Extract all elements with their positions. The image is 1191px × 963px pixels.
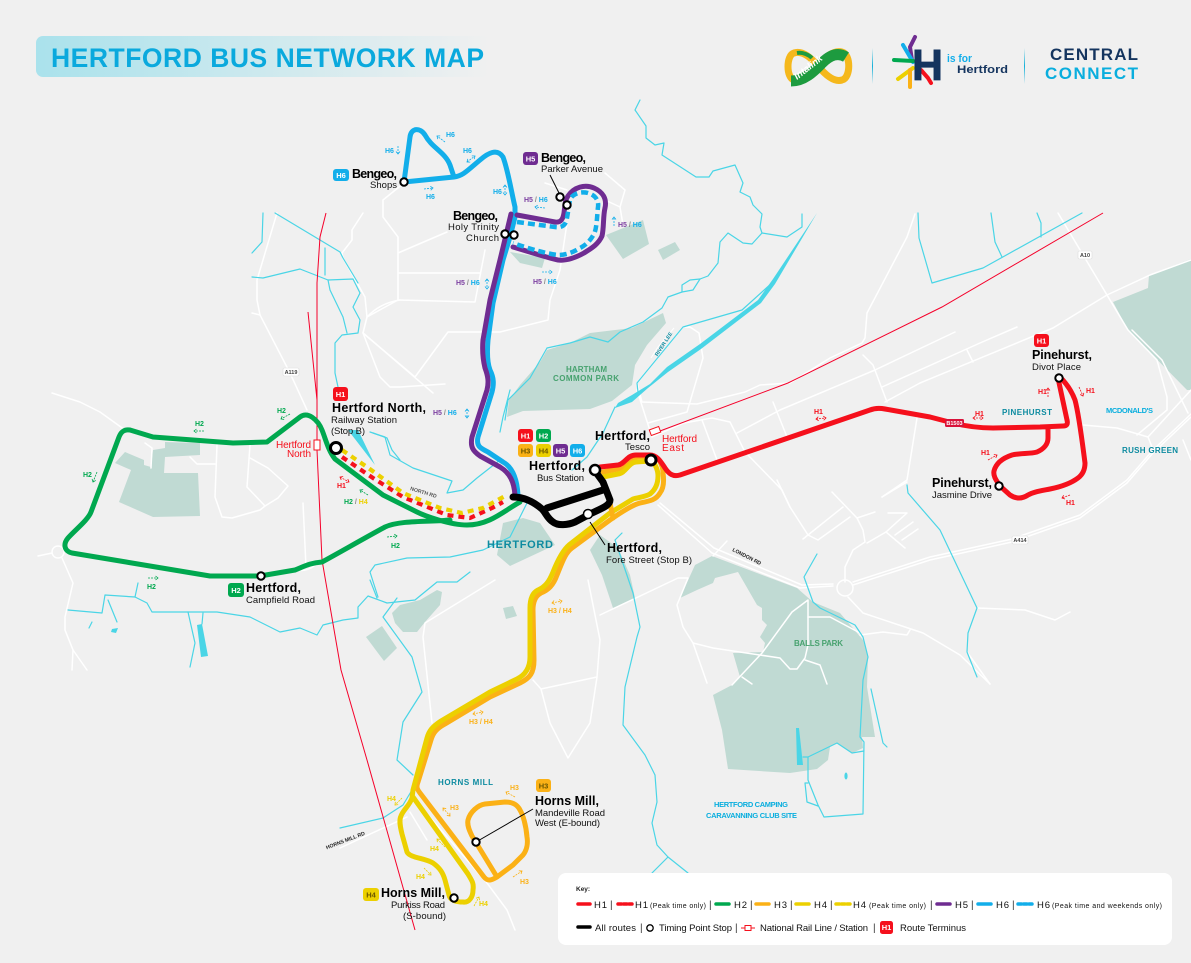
route H6 loop dashed <box>513 192 598 255</box>
direction labels: H3 and H4: H4 <box>479 901 488 908</box>
stop: Horns Mill Purkiss Road: Horns Mill, <box>381 886 445 900</box>
direction labels: H2: H2 <box>147 584 156 591</box>
stop: Hertford Bus Station: Hertford, <box>529 459 585 473</box>
stop: Bengeo Shops: H6 <box>336 171 346 180</box>
direction labels: H3 and H4: H3 <box>520 879 529 886</box>
key row: routes: | <box>610 900 613 911</box>
stop: Hertford Fore Street: Hertford, <box>607 541 662 555</box>
London Rd label: LONDON RD <box>731 547 762 567</box>
title banner <box>36 36 490 77</box>
key row: routes: H1 <box>594 900 607 911</box>
stop: Bengeo Shops: Bengeo, <box>352 167 397 181</box>
direction labels: H3 and H4: H3 / H4 <box>548 608 572 615</box>
direction labels: H3 and H4 <box>387 601 572 908</box>
direction labels: H6: H6 <box>426 194 435 201</box>
key row: other symbols: | <box>640 923 643 934</box>
key row: routes: | <box>971 900 974 911</box>
stop: Bengeo Shops <box>333 167 408 191</box>
station: Hertford East rail: Hertford <box>662 434 697 445</box>
direction labels: H5 / H6: H5 / H6 <box>433 410 457 417</box>
key heading: Key: <box>576 886 590 893</box>
stop: Hertford North: H1 <box>336 390 345 399</box>
direction labels: H6 <box>385 132 505 201</box>
route H2 <box>65 415 520 576</box>
direction labels: H1: H1 <box>814 409 823 416</box>
stop: Horns Mill Purkiss Road <box>363 886 458 922</box>
direction labels: H2: H2 <box>83 472 92 479</box>
direction labels: H3 and H4: H3 / H4 <box>469 719 493 726</box>
stop: Hertford Tesco: Tesco <box>625 442 650 453</box>
logo: H is for Hertford: H <box>912 41 943 90</box>
key row: other symbols: All routes <box>595 923 636 934</box>
shield B1503: B1503 <box>946 421 963 427</box>
logo: Intalink <box>788 52 849 82</box>
H3 H4 connector <box>610 503 613 518</box>
central route badges: H3 <box>521 446 530 456</box>
direction labels: H2: H2 / H4 <box>344 499 368 506</box>
direction labels: H1: H1 <box>1038 389 1047 396</box>
station: Hertford North rail: Hertford <box>276 440 311 451</box>
stop: Pinehurst Divot Place: Pinehurst, <box>1032 348 1092 362</box>
route H6 <box>404 130 518 495</box>
logo: Central Connect: CENTRAL <box>1050 45 1138 64</box>
direction labels: H5 / H6: H5 / H6 <box>456 280 480 287</box>
thick water channels <box>111 213 848 780</box>
place names: COMMON PARK <box>553 374 619 383</box>
title banner: HERTFORD BUS NETWORK MAP <box>51 43 484 73</box>
key row: other symbols: Timing Point Stop <box>659 923 732 934</box>
logo: H is for Hertford: Hertford <box>957 64 1008 76</box>
stop: Pinehurst Divot Place: Divot Place <box>1032 362 1081 373</box>
shield B1503 <box>945 419 964 427</box>
stop: Hertford Bus Station: Bus Station <box>537 473 584 484</box>
key row: routes: H3 <box>774 900 787 911</box>
central route badges: H6 <box>573 446 582 456</box>
key row: routes <box>578 900 1162 911</box>
stop: Hertford Tesco <box>595 429 656 465</box>
stop: Bengeo Holy Trinity Church: Church <box>466 233 499 244</box>
stop: Hertford Campfield Road <box>228 572 315 606</box>
all routes black section <box>513 471 610 525</box>
stop: Horns Mill Mandeville Road <box>472 779 605 846</box>
logo: Intalink: Intalink <box>792 53 826 82</box>
key row: other symbols: | <box>873 923 876 934</box>
central route badges: H1 <box>521 432 530 440</box>
Horns Mill Rd label: HORNS MILL RD <box>325 831 366 851</box>
direction labels: H1 <box>337 387 1095 507</box>
stop: Horns Mill Purkiss Road: (S-bound) <box>403 911 446 922</box>
place names: CARAVANNING CLUB SITE <box>706 811 797 820</box>
North Rd label: NORTH RD <box>409 486 437 500</box>
shield A10 <box>1078 251 1092 259</box>
direction labels: H3 and H4: H4 <box>387 796 396 803</box>
key row: other symbols: H1 <box>882 923 891 932</box>
stop: Horns Mill Purkiss Road: Purkiss Road <box>391 900 445 911</box>
key row: routes: H4 <box>814 900 827 911</box>
logo: H is for Hertford <box>894 37 1008 90</box>
stop: Hertford North <box>330 387 426 454</box>
route H5 loop <box>513 186 606 260</box>
station: Hertford East rail: East <box>662 443 684 454</box>
direction labels: H2: H2 <box>195 421 204 428</box>
route H3 town <box>417 456 664 880</box>
key row: routes: | <box>750 900 753 911</box>
divider <box>872 48 873 84</box>
direction labels: H1: H1 <box>337 483 346 490</box>
direction labels: H5 / H6: H5 / H6 <box>524 197 548 204</box>
direction labels: H6: H6 <box>385 148 394 155</box>
key row: routes: | <box>830 900 833 911</box>
stop: Bengeo Parker Avenue: Bengeo, <box>541 151 586 165</box>
panel: key <box>558 873 1172 945</box>
direction labels: H6: H6 <box>446 132 455 139</box>
key row: other symbols: National Rail Line / Station <box>760 923 868 934</box>
key row: routes: | <box>790 900 793 911</box>
direction labels: H3 and H4: H4 <box>430 846 439 853</box>
direction labels: H3 and H4: H3 <box>510 785 519 792</box>
route H1 peak dashed <box>342 457 503 518</box>
stop: Bengeo Parker Avenue: H5 <box>526 154 535 164</box>
stop: Pinehurst Divot Place: H1 <box>1037 336 1046 346</box>
stop: Bengeo Shops: Shops <box>370 180 397 191</box>
Hertford label: HERTFORD <box>487 539 553 551</box>
stop: Bengeo Holy Trinity Church: Holy Trinity <box>448 222 499 233</box>
key row: routes: | <box>930 900 933 911</box>
divider <box>1024 48 1025 84</box>
stop: Hertford Campfield Road: H2 <box>231 586 241 595</box>
shield A10: A10 <box>1080 253 1090 259</box>
logo: Central Connect: CONNECT <box>1045 64 1139 83</box>
direction labels: H3 and H4: H4 <box>416 874 425 881</box>
stop: Bengeo Holy Trinity Church <box>448 209 518 244</box>
central route badges <box>518 429 585 457</box>
McDonald's label: MCDONALD'S <box>1106 406 1153 415</box>
stop: Bengeo Parker Avenue: Parker Avenue <box>541 164 603 175</box>
direction labels: H1: H1 <box>1066 500 1075 507</box>
logo: H is for Hertford: is for <box>947 53 973 65</box>
key row: routes: (Peak time only) <box>869 903 926 910</box>
logo: Central Connect <box>1045 45 1139 83</box>
stop: Pinehurst Jasmine Drive: Pinehurst, <box>932 476 992 490</box>
route H5 <box>471 214 515 495</box>
direction labels: H5 / H6: H5 / H6 <box>618 222 642 229</box>
key row: routes: H1 <box>635 900 648 911</box>
stop: Hertford Bus Station <box>529 459 600 484</box>
key row: routes: H4 <box>853 900 866 911</box>
rivers and waterways <box>68 100 1082 873</box>
Balls Park label: BALLS PARK <box>794 639 843 648</box>
key row: other symbols: Route Terminus <box>900 923 966 934</box>
shield A119: A119 <box>285 370 297 376</box>
route H1 <box>600 377 1085 498</box>
direction labels: H1: H1 <box>1086 388 1095 395</box>
stop: Hertford Campfield Road: Hertford, <box>246 581 301 595</box>
direction labels: H6: H6 <box>463 148 472 155</box>
key row: routes: H6 <box>1037 900 1050 911</box>
central route badges: H5 <box>556 446 565 456</box>
national rail lines <box>308 213 1103 930</box>
key row: other symbols <box>578 921 966 934</box>
direction labels: H3 and H4: H3 <box>450 805 459 812</box>
direction labels: H2 <box>83 408 400 591</box>
key row: routes: (Peak time only) <box>650 903 706 910</box>
stop: Pinehurst Jasmine Drive <box>932 476 1003 501</box>
key row: routes: (Peak time and weekends only) <box>1052 903 1162 910</box>
stop: Hertford Campfield Road: Campfield Road <box>246 595 315 606</box>
place names <box>438 365 1178 820</box>
central route badges: H2 <box>539 432 548 440</box>
shield A414: A414 <box>1013 538 1028 544</box>
stop: Hertford North: Hertford North, <box>332 401 426 415</box>
stop: Horns Mill Mandeville Road: Mandeville Road <box>535 808 605 819</box>
Horns Mill label: HORNS MILL <box>438 778 493 787</box>
stop: Horns Mill Mandeville Road: H3 <box>539 782 548 790</box>
Hartham Common Park label: HARTHAM <box>566 365 607 374</box>
stop: Pinehurst Divot Place <box>1032 334 1092 382</box>
River Lee label: RIVER LEE <box>654 331 674 358</box>
direction labels: H5 / H6 <box>433 197 642 418</box>
key row: other symbols: | <box>735 923 738 934</box>
stop: Pinehurst Jasmine Drive: Jasmine Drive <box>932 490 992 501</box>
key row: routes: H2 <box>734 900 747 911</box>
key row: routes: H6 <box>996 900 1009 911</box>
route H4 town <box>400 461 658 902</box>
stop: Hertford North: (Stop B) <box>331 426 365 437</box>
stop: Bengeo Holy Trinity Church: Bengeo, <box>453 209 498 223</box>
key row: routes: H5 <box>955 900 968 911</box>
shield A119 <box>283 368 299 376</box>
parks and green spaces <box>115 220 1191 773</box>
leader lines <box>476 175 605 842</box>
central route badges: H4 <box>539 446 549 456</box>
Camping label: HERTFORD CAMPING <box>714 800 788 809</box>
stop: Hertford Fore Street <box>584 510 692 566</box>
stop: Hertford Fore Street: Fore Street (Stop B) <box>606 555 692 566</box>
key row: routes: | <box>709 900 712 911</box>
route H4 peak dashed <box>342 450 507 513</box>
direction labels: H6: H6 <box>493 189 502 196</box>
road and river names <box>325 328 762 851</box>
direction labels: H5 / H6: H5 / H6 <box>533 279 557 286</box>
station: Hertford North rail: North <box>287 449 311 460</box>
key row: routes: | <box>1012 900 1015 911</box>
stop: Horns Mill Mandeville Road: Horns Mill, <box>535 794 599 808</box>
stop: Horns Mill Mandeville Road: West (E-bound) <box>535 818 600 829</box>
road network <box>38 173 1191 930</box>
shield A414 <box>1012 536 1028 544</box>
station: Hertford North rail <box>276 440 320 460</box>
stop: Hertford North: Railway Station <box>331 415 397 426</box>
stop: Horns Mill Purkiss Road: H4 <box>366 890 377 900</box>
road shields <box>283 251 1092 544</box>
stop: Bengeo Parker Avenue <box>523 151 603 209</box>
direction labels: H2: H2 <box>277 408 286 415</box>
Pinehurst label: PINEHURST <box>1002 408 1052 417</box>
direction labels: H1: H1 <box>975 411 984 418</box>
direction labels: H1: H1 <box>981 450 990 457</box>
station: Hertford East rail <box>649 426 697 454</box>
stop: Hertford Tesco: Hertford, <box>595 429 650 443</box>
direction labels: H2: H2 <box>391 543 400 550</box>
Rush Green label: RUSH GREEN <box>1122 446 1178 455</box>
